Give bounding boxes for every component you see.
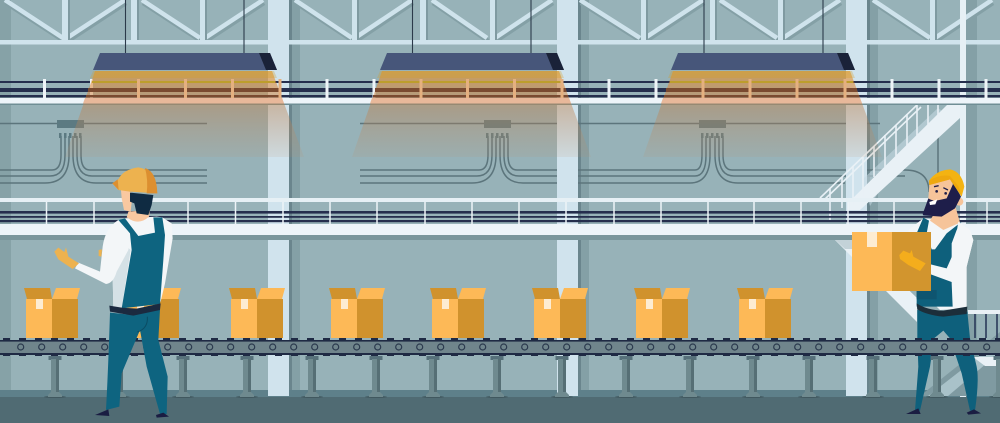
left worker helmet [112, 167, 157, 193]
conveyor legs [44, 356, 1000, 398]
right worker beard [923, 183, 961, 217]
right worker glove [899, 250, 926, 271]
left worker arm [75, 220, 131, 284]
left worker glove [54, 247, 79, 269]
lamp: centre [352, 0, 591, 157]
left worker shirt back [113, 217, 173, 308]
right worker sleeve [923, 222, 973, 283]
wiring: left [0, 124, 207, 183]
column shadows [289, 0, 977, 397]
carried box [852, 232, 931, 291]
left wall band [0, 0, 11, 390]
floor [0, 397, 1000, 423]
left worker overalls [118, 217, 165, 308]
wiring: centre and right [360, 124, 938, 192]
tall white post [960, 0, 966, 397]
lower catwalk [0, 198, 1000, 240]
skirting [0, 390, 1000, 397]
right worker legs [915, 310, 978, 411]
columns [268, 0, 867, 396]
right worker eyes [934, 186, 948, 190]
left worker ear and face [121, 187, 133, 212]
lamp: right [643, 0, 882, 157]
right worker helmet [929, 169, 964, 197]
right worker neck [930, 205, 960, 230]
worker: left, pointing at boxes [54, 167, 173, 418]
left worker neck [127, 210, 150, 222]
left worker belt [109, 303, 161, 316]
left worker legs [106, 309, 168, 414]
right worker overalls [917, 218, 962, 307]
left worker shoes [95, 409, 169, 418]
right worker shirt [908, 218, 973, 310]
left worker hair [130, 193, 153, 215]
cardboard boxes on belt [24, 288, 793, 338]
upper catwalk [0, 79, 1000, 105]
roof truss [0, 0, 1000, 44]
lamp: left [65, 0, 304, 157]
right worker belt [917, 303, 967, 317]
conveyor belt [0, 338, 1000, 356]
right worker shoes [906, 408, 981, 415]
worker: right, carrying box [906, 169, 981, 415]
left worker far hand [99, 249, 102, 257]
wiring junction boxes [57, 120, 726, 138]
right worker face [928, 178, 957, 205]
staircase lower flight [830, 235, 1000, 396]
staircase upper flight [820, 105, 960, 222]
